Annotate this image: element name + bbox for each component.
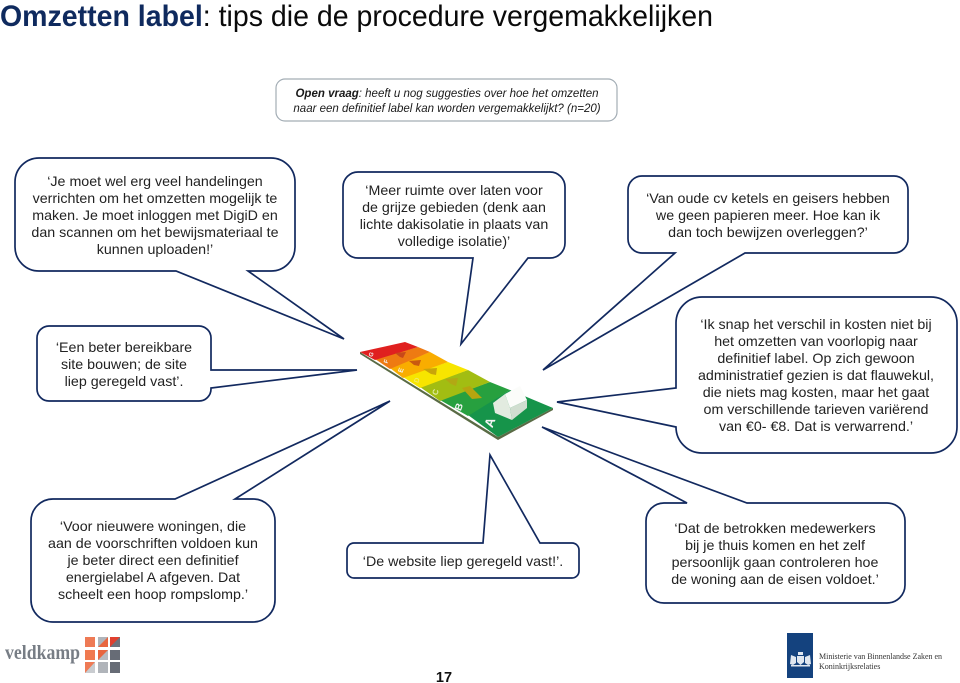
callout: nieuwere woningen <box>31 401 390 622</box>
callout: veel handelingen <box>15 158 344 339</box>
callout: grijze gebieden: de grijze gebieden (denk aan <box>362 200 546 216</box>
callout: veel handelingen: dan scannen om het bewijsmateriaal te <box>31 225 279 241</box>
callout: grijze gebieden: ‘Meer ruimte over laten voor <box>365 183 543 199</box>
callout: oude cv ketels: ‘Van oude cv ketels en geisers hebben <box>646 191 890 207</box>
callout: nieuwere woningen: je beter direct een definitief <box>66 553 239 569</box>
title: Omzetten label: tips die de procedure vergemakkelijken <box>0 0 713 33</box>
band letters: C <box>430 388 441 396</box>
callout: nieuwere woningen: ‘Voor nieuwere woningen, die <box>60 519 246 535</box>
band letters: F <box>384 359 391 364</box>
logo: ministerie: Ministerie van Binnenlandse Zaken en <box>819 652 942 661</box>
callout: verschil in kosten <box>557 297 957 453</box>
band letters: A <box>481 415 499 429</box>
band letters: E <box>398 367 406 374</box>
question box: naar een definitief label kan worden vergemakkelijkt? (n=20) <box>293 103 601 115</box>
band A <box>468 390 553 437</box>
callout: verschil in kosten: definitief label. Op zich gewoon <box>717 351 915 367</box>
icon: house <box>493 386 527 420</box>
band D <box>403 362 468 388</box>
band letters: D <box>413 377 422 384</box>
band F <box>375 347 430 369</box>
logo: ministerie: Koninkrijksrelaties <box>819 662 880 671</box>
callout: oude cv ketels: we geen papieren meer. Hoe kan ik <box>655 208 881 224</box>
callout: bereikbare site <box>37 326 357 401</box>
callout: nieuwere woningen: aan de voorschriften voldoen kun <box>48 536 258 552</box>
callout: oude cv ketels <box>543 176 908 370</box>
callout: grijze gebieden: volledige isolatie)’ <box>398 234 510 250</box>
callout: bereikbare site: ‘Een beter bereikbare <box>56 340 192 356</box>
callout: betrokken medewerkers: persoonlijk gaan controleren hoe <box>672 555 878 571</box>
question box <box>276 79 617 121</box>
callout: grijze gebieden <box>343 172 565 344</box>
callout: website liep vast: ‘De website liep geregeld vast!’. <box>363 554 563 570</box>
band G <box>360 342 418 360</box>
callout: bereikbare site: liep geregeld vast’. <box>65 374 183 390</box>
band arrows <box>395 352 482 399</box>
band C <box>420 370 490 401</box>
band letters: B <box>453 402 466 412</box>
callout: bereikbare site: site bouwen; de site <box>61 357 187 373</box>
callout: veel handelingen: maken. Je moet inloggen met DigiD en <box>32 208 278 224</box>
callout: nieuwere woningen: scheelt een hoop rompslomp.’ <box>58 587 248 603</box>
callout: verschil in kosten: het omzetten van voorlopig naar <box>714 334 918 350</box>
callout: verschil in kosten: ‘Ik snap het verschil in kosten niet bij <box>700 317 932 333</box>
band letters: G <box>368 351 376 358</box>
callout: verschil in kosten: administratief gezien is dat flauwekul, <box>698 368 934 384</box>
callout: grijze gebieden: lichte dakisolatie in plaats van <box>360 217 548 233</box>
callout: betrokken medewerkers: de woning aan de eisen voldoet.’ <box>671 572 879 588</box>
callout: betrokken medewerkers: bij je thuis komen en het zelf <box>685 538 865 554</box>
callout: veel handelingen: ‘Je moet wel erg veel handelingen <box>47 174 263 190</box>
callout: oude cv ketels: dan toch bewijzen overleggen?’ <box>668 225 868 241</box>
callout: veel handelingen: verrichten om het omzetten mogelijk te <box>33 191 277 207</box>
band letters <box>368 351 499 429</box>
icon: crest <box>790 652 811 666</box>
band B <box>440 382 510 416</box>
logo: veldkamp <box>5 637 120 673</box>
band E <box>390 352 448 378</box>
callout: nieuwere woningen: energielabel A afgeven. Dat <box>66 570 240 586</box>
logo: veldkamp: veldkamp <box>5 642 80 664</box>
callout: verschil in kosten: van €0- €8. Dat is verwarrend.’ <box>719 419 913 435</box>
question box: Open vraag: heeft u nog suggesties over hoe het omzetten <box>295 88 599 100</box>
callout: betrokken medewerkers <box>542 427 905 603</box>
callout: veel handelingen: kunnen uploaden!’ <box>97 242 213 258</box>
energy label illustration <box>360 342 553 440</box>
logo: ministerie <box>787 633 942 678</box>
board side <box>360 352 553 440</box>
callout: verschil in kosten: die niets mag kosten, maar het gaat <box>703 385 929 401</box>
callout: betrokken medewerkers: ‘Dat de betrokken medewerkers <box>674 521 876 537</box>
callout: verschil in kosten: om verschillende tarieven variërend <box>704 402 928 418</box>
callout: website liep vast <box>347 455 579 578</box>
